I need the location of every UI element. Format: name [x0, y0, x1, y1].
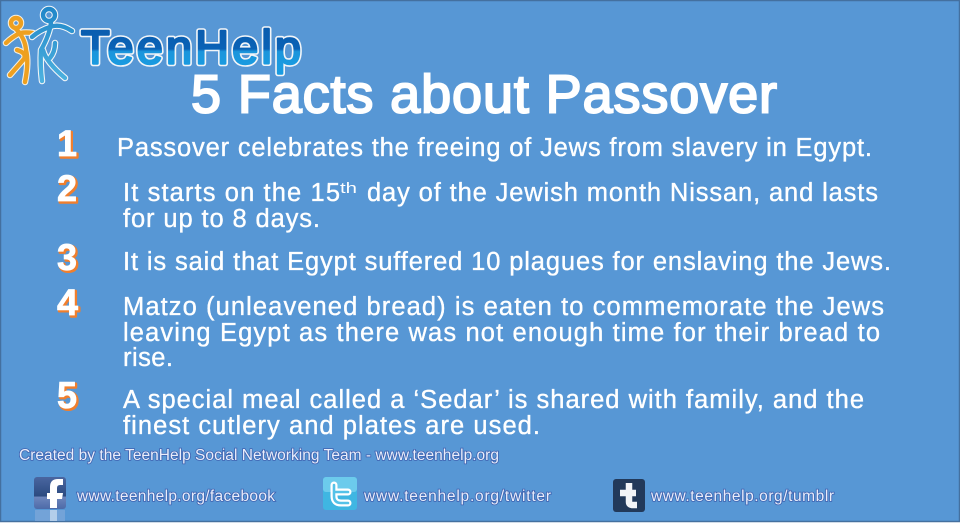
- fact 3: 3: [58, 238, 78, 280]
- fact 1: 1: [58, 124, 78, 166]
- fact 4: rise.: [123, 344, 173, 372]
- facebook link: [34, 477, 275, 521]
- fact 4: Matzo (unleavened bread) is eaten to commemorate the Jews: [123, 293, 884, 321]
- fact 3: [57, 237, 891, 280]
- fact 4: leaving Egypt as there was not enough time for their bread to: [123, 319, 880, 347]
- fact 2: th: [340, 180, 357, 197]
- fact 3: It is said that Egypt suffered 10 plagues for enslaving the Jews.: [123, 248, 891, 276]
- fact 2: for up to 8 days.: [123, 205, 320, 233]
- icon: blue figure: [32, 9, 72, 81]
- fact 1: Passover celebrates the freeing of Jews from slavery in Egypt.: [117, 134, 872, 162]
- fact 3: 3: [57, 237, 77, 278]
- twitter link: www.teenhelp.org/twitter: [363, 488, 551, 505]
- icon: tumblr: [613, 479, 645, 512]
- fact 2: It starts on the 15: [123, 179, 340, 207]
- fact 1: 1: [57, 123, 77, 164]
- fact 5: finest cutlery and plates are used.: [123, 412, 540, 440]
- fact 2: 2: [57, 168, 77, 209]
- tumblr link: www.teenhelp.org/tumblr: [650, 488, 834, 505]
- icon: twitter: [323, 477, 357, 510]
- credit line: Created by the TeenHelp Social Networking Team - www.teenhelp.org: [19, 447, 499, 464]
- fact 2: day of the Jewish month Nissan, and lasts: [367, 179, 878, 207]
- facebook link: www.teenhelp.org/facebook: [76, 488, 275, 505]
- fact 2: [57, 168, 878, 233]
- logo: TeenHelp: [6, 9, 301, 82]
- fact 4: 4: [57, 282, 78, 323]
- fact 5: A special meal called a ‘Sedar’ is shared with family, and the: [123, 386, 864, 414]
- icon: orange figure: [6, 18, 33, 82]
- fact 5: 5: [58, 376, 78, 418]
- twitter link: [323, 477, 551, 510]
- fact 5: [57, 375, 864, 440]
- fact 1: [57, 123, 872, 166]
- logo wordmark: TeenHelp: [81, 20, 301, 74]
- fact 4: 4: [58, 284, 80, 324]
- icon: facebook: [34, 477, 66, 521]
- title: 5 Facts about Passover: [191, 64, 777, 124]
- logo wordmark: TeenHelp: [81, 20, 301, 74]
- fact 4: [57, 282, 884, 372]
- fact 2: 2: [58, 170, 78, 210]
- fact 5: 5: [57, 375, 77, 416]
- tumblr link: [613, 479, 834, 512]
